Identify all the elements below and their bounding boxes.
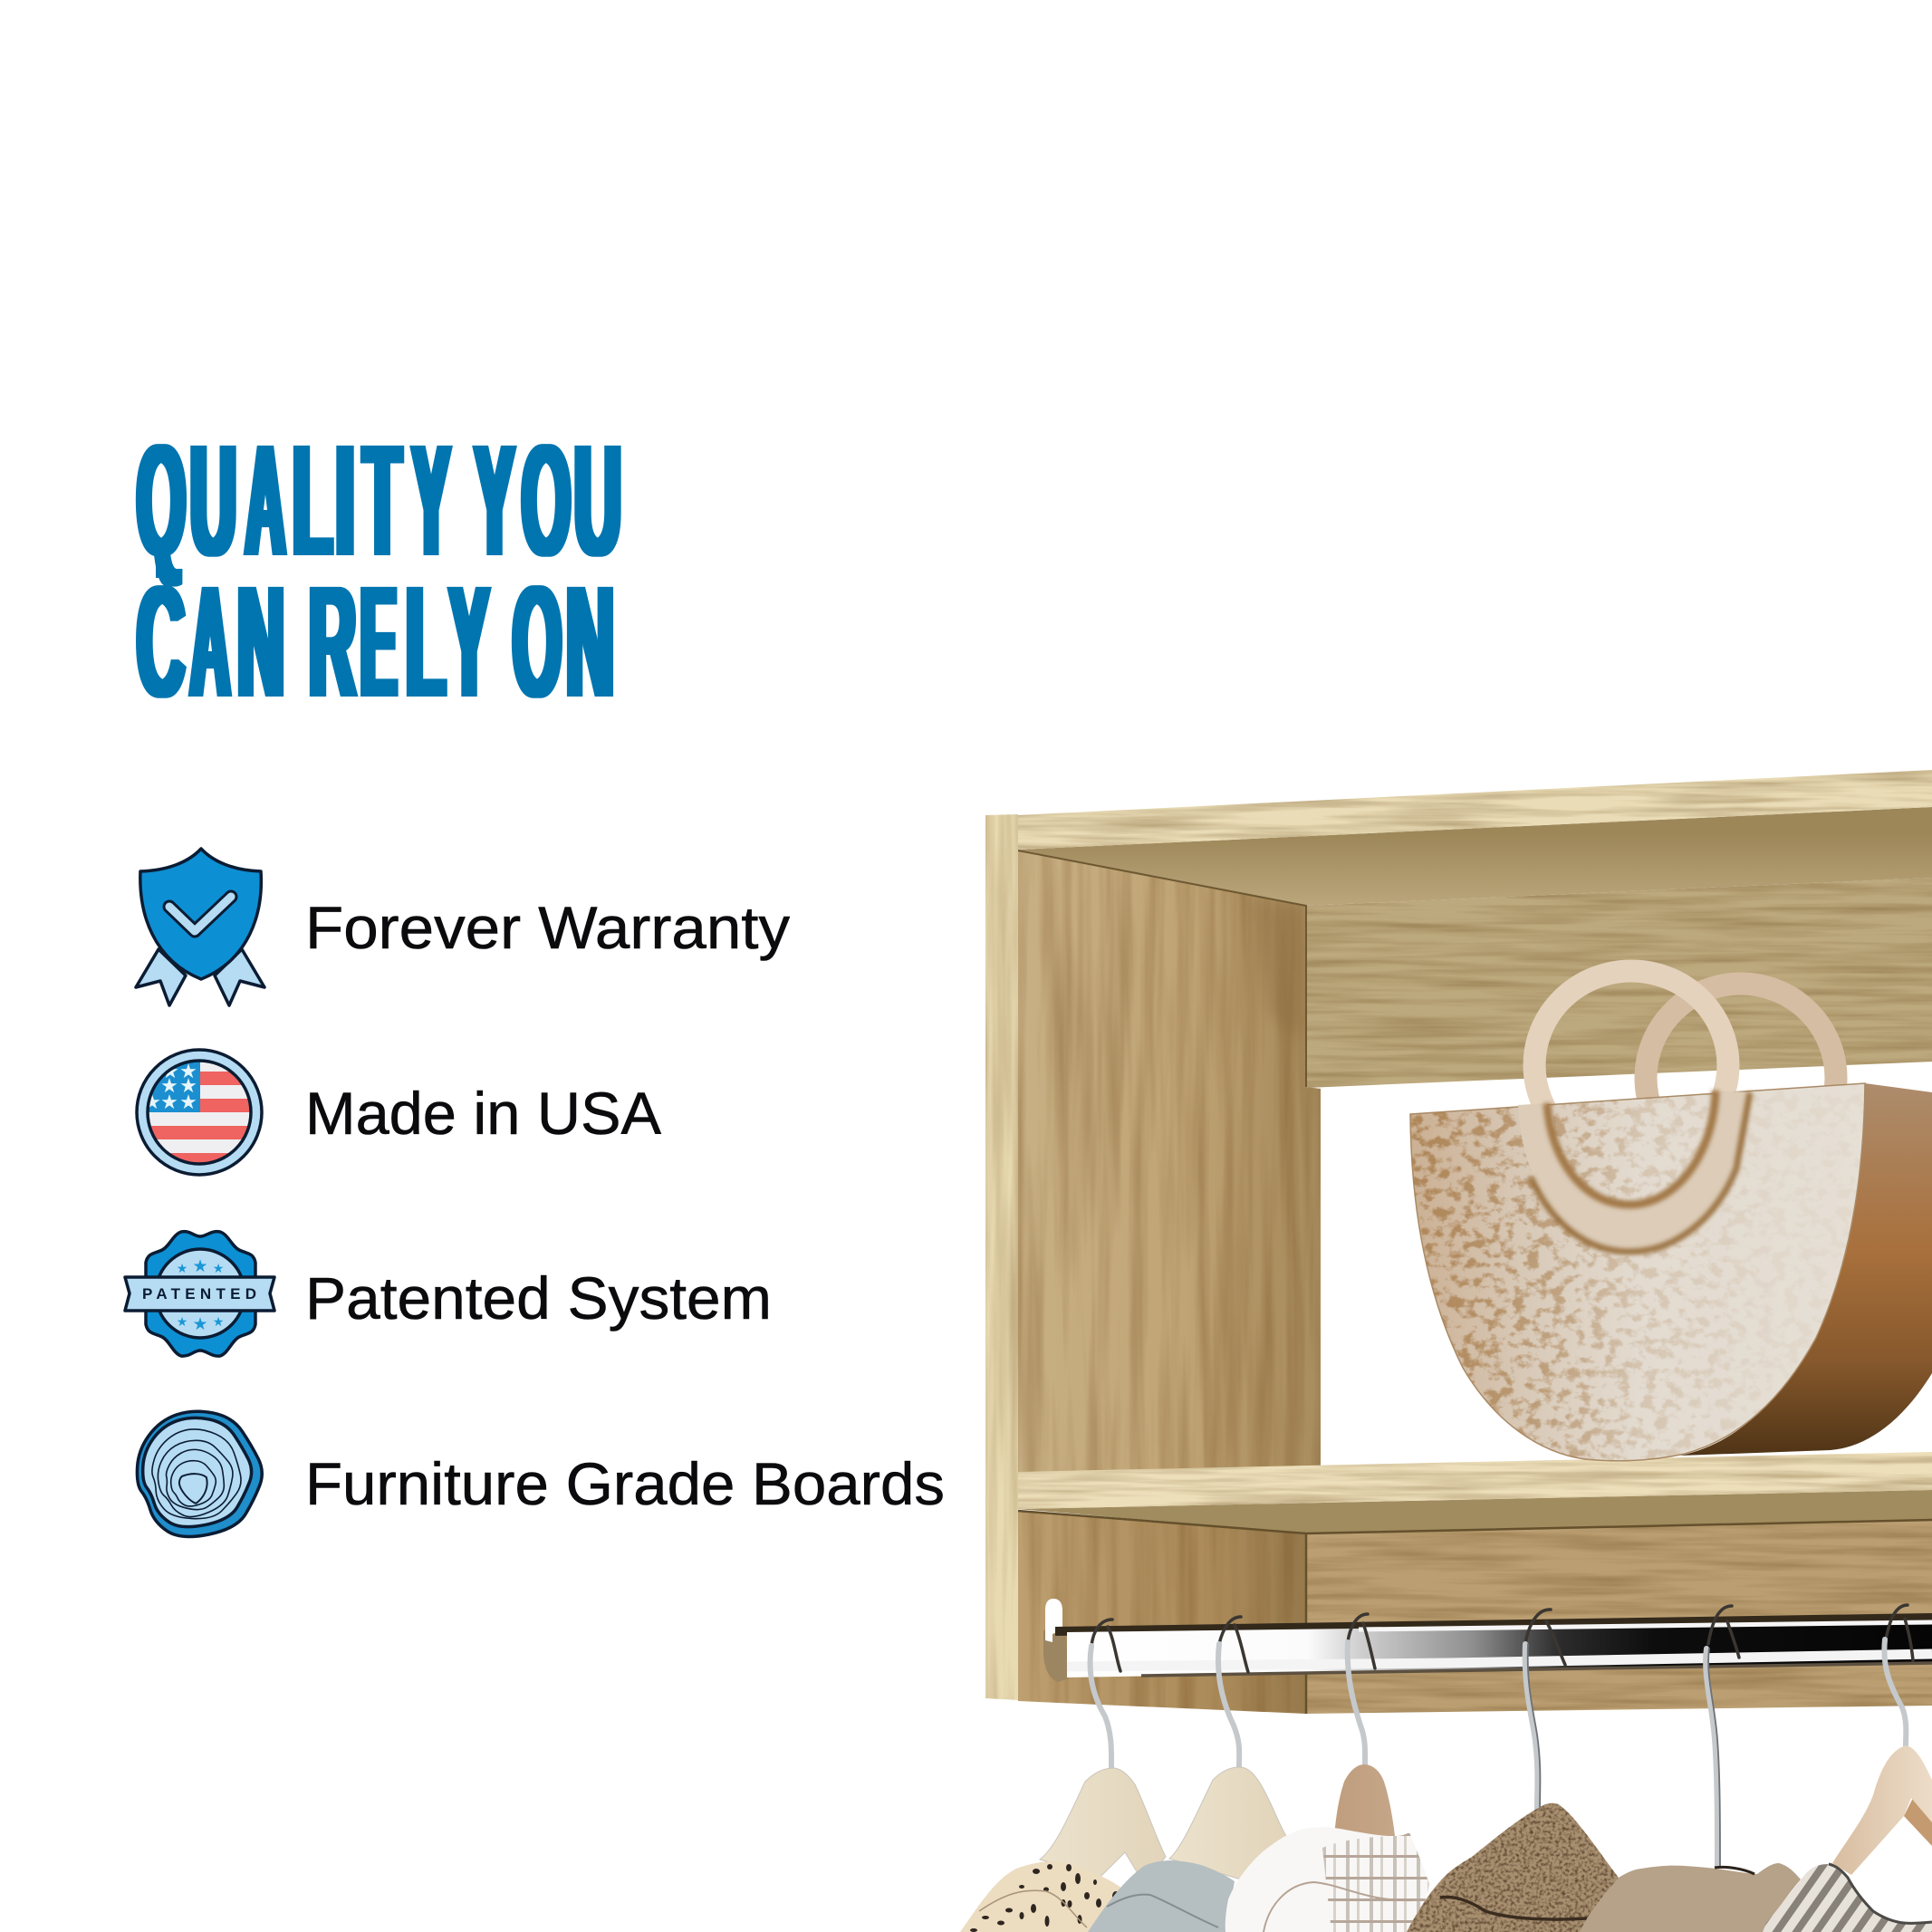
- hanger 6: [1832, 1745, 1932, 1875]
- title: A: [190, 553, 230, 731]
- icon: usa flag: [137, 1050, 262, 1175]
- bottom edge: [1141, 1663, 1932, 1676]
- icon: usa flag: ★: [161, 1061, 179, 1083]
- bag side: [1680, 1083, 1932, 1456]
- text: furniture grade boards: Furniture Grade Boards: [305, 1450, 945, 1517]
- rear handle ring: [1646, 984, 1836, 1172]
- title: L: [406, 553, 446, 731]
- icon: patented badge: ★: [192, 1314, 208, 1334]
- mounting slot: [1045, 1599, 1062, 1642]
- title: Y: [475, 412, 514, 590]
- top front edge: [1018, 770, 1932, 850]
- title: O: [522, 412, 571, 590]
- front handle ring: [1534, 971, 1728, 1159]
- wooden hangers: [1040, 1745, 1932, 1882]
- infographic canvas: N: [566, 553, 614, 731]
- title: O: [513, 553, 562, 731]
- hanger hooks: [1090, 1605, 1913, 1866]
- upper back board: [1306, 878, 1932, 1088]
- hanger 6 right leg: [1904, 1798, 1932, 1846]
- title: C: [137, 553, 185, 731]
- title: [137, 412, 621, 731]
- hanger 2: [1169, 1767, 1286, 1879]
- icon: patented badge: ★: [177, 1315, 187, 1330]
- Q tail: [156, 554, 176, 578]
- top highlight: [1359, 1622, 1932, 1629]
- icon: usa flag: ★: [160, 1091, 178, 1114]
- left inner panel: [1018, 850, 1321, 1475]
- icon: patented badge: ★: [213, 1262, 224, 1276]
- hanger 1: [1040, 1768, 1166, 1882]
- rod body: [1067, 1621, 1932, 1677]
- icon: patented badge: ★: [177, 1262, 187, 1276]
- under-shelf band: [1018, 1490, 1932, 1533]
- text: forever warranty: Forever Warranty: [305, 894, 790, 961]
- icon: patented badge: ★: [192, 1256, 208, 1276]
- garment: white plaid: [1226, 1827, 1429, 1932]
- icon: patented badge: PATENTED: [142, 1285, 256, 1302]
- icon: patented badge: [125, 1232, 274, 1356]
- left front edge: [985, 814, 1018, 1700]
- handle inner shading: [1547, 1091, 1716, 1205]
- handle outer shading: [1531, 1092, 1750, 1252]
- title: Q: [137, 412, 186, 590]
- icon: usa flag: ★: [179, 1075, 197, 1098]
- icon: usa flag: ★: [143, 1091, 161, 1114]
- lower left panel: [1018, 1511, 1306, 1714]
- icon: patented badge: ★: [213, 1315, 224, 1330]
- title: L: [293, 412, 332, 590]
- infographic canvas: U: [574, 412, 621, 590]
- garment: tan: [1580, 1863, 1801, 1932]
- underside of top board: [1018, 807, 1932, 906]
- icon: usa flag: ★: [179, 1061, 197, 1083]
- shelf unit: [985, 770, 1932, 1714]
- panel top-right shadow: [1250, 897, 1306, 1042]
- title: U: [190, 412, 236, 590]
- bottom chrome strip: [1067, 1654, 1932, 1667]
- title: R: [309, 553, 356, 731]
- icon: usa flag: ★: [179, 1091, 197, 1114]
- handbag: [1410, 971, 1932, 1461]
- title: Y: [449, 553, 489, 731]
- hanger 3: [1334, 1764, 1395, 1836]
- seam under top: [1018, 851, 1306, 1087]
- garment: grey: [1088, 1860, 1235, 1932]
- title: E: [360, 553, 397, 731]
- under-shelf seam: [1018, 1511, 1932, 1714]
- bag front face: [1410, 1083, 1865, 1461]
- title: A: [245, 412, 285, 590]
- icon: wood rings: [137, 1411, 262, 1537]
- garment: brown knit: [1407, 1803, 1619, 1932]
- text: made in usa: Made in USA: [305, 1080, 661, 1147]
- icon: shield warranty: [136, 849, 264, 1005]
- clothing on hangers: [960, 1803, 1932, 1932]
- rod mounting bracket: [1043, 1626, 1069, 1682]
- lower back board: [1306, 1520, 1932, 1714]
- title: N: [237, 553, 284, 731]
- infographic canvas: [123, 444, 1932, 1932]
- bag mottled texture: [1410, 1083, 1865, 1461]
- rod shadow strip: [1055, 1613, 1932, 1636]
- middle shelf front: [1018, 1452, 1932, 1509]
- text: patented system: Patented System: [305, 1264, 772, 1331]
- lower handle on bag: [1518, 1091, 1750, 1252]
- title: T: [363, 412, 401, 590]
- chrome hanging rod: [1043, 1599, 1932, 1682]
- icon: usa flag: ★: [160, 1075, 178, 1098]
- title: I: [335, 412, 355, 590]
- garment: polka dot: [960, 1861, 1122, 1932]
- title: Y: [412, 412, 450, 590]
- garment: zigzag pattern: [1763, 1864, 1932, 1932]
